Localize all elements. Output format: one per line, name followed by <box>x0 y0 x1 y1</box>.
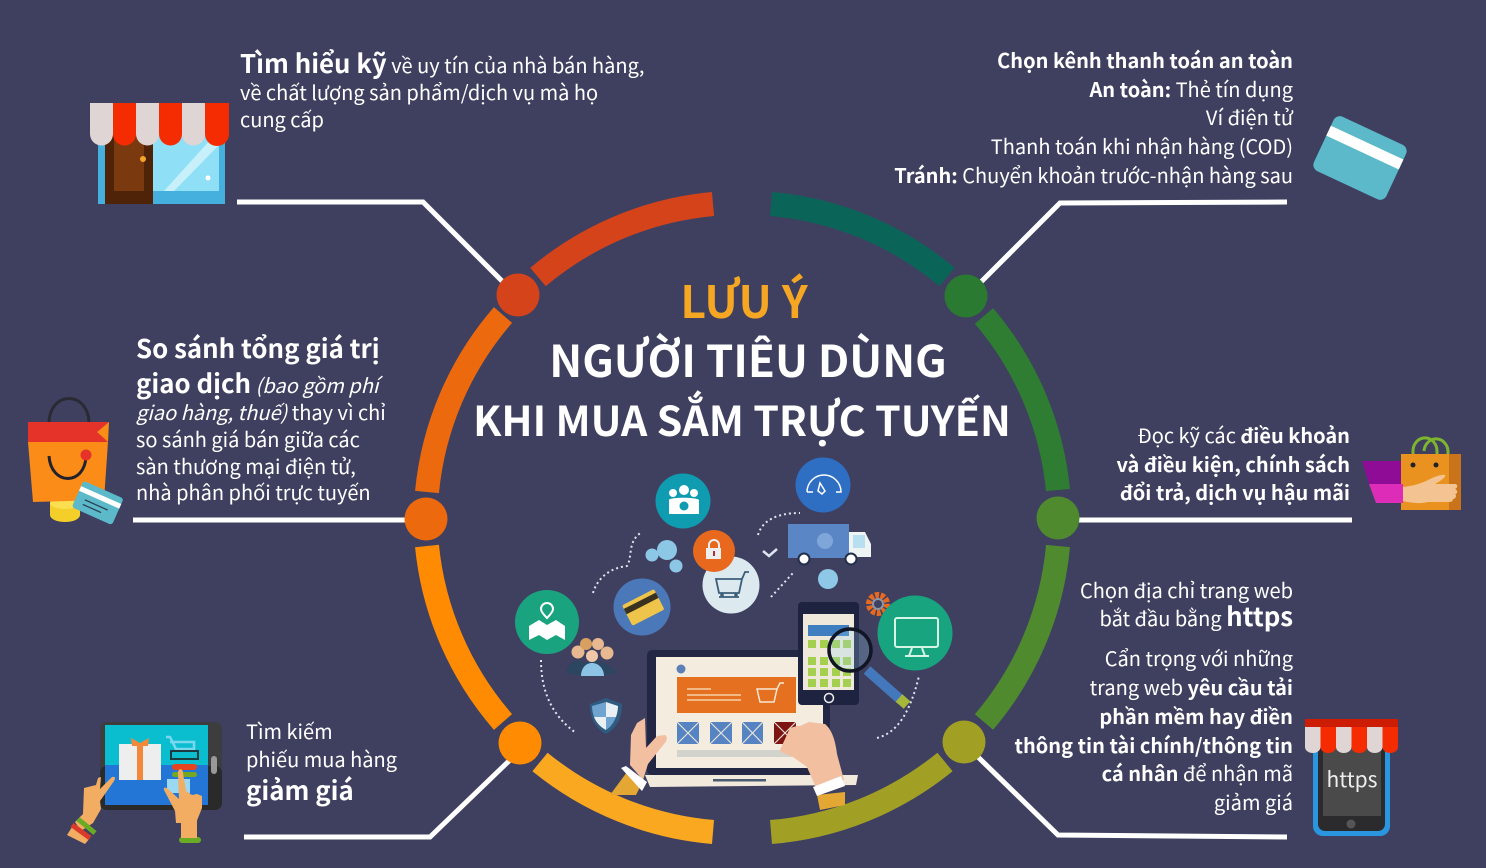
text: safe payment: Ví điện tử <box>1206 102 1294 131</box>
title: NGƯỜI TIÊU DÙNG <box>549 326 947 390</box>
text: read terms: đổi trả, dịch vụ hậu mãi <box>1120 477 1350 506</box>
icon: shield <box>590 698 622 734</box>
text: safe payment <box>894 45 1294 189</box>
text: safe payment: Chọn kênh thanh toán an toàn <box>997 45 1293 74</box>
icon: map <box>515 590 579 654</box>
text: read terms <box>1116 420 1350 506</box>
text: compare total value: nhà phân phối trực tuyến <box>136 477 371 506</box>
icon: tablet with gift and hands <box>67 722 222 844</box>
icon: truck <box>788 524 871 564</box>
text: compare total value: giao hàng, thuế) thay vì chỉ <box>136 397 386 426</box>
text: compare total value <box>136 329 386 506</box>
text: https and caution: giảm giá <box>1214 787 1293 816</box>
text: research the seller: cung cấp <box>240 104 324 133</box>
text: research the seller: Tìm hiểu kỹ về uy tín của nhà bán hàng, <box>240 44 644 81</box>
magnifier <box>829 629 907 705</box>
text: safe payment: Thanh toán khi nhận hàng (COD) <box>991 131 1293 160</box>
text: discount vouchers: Tìm kiếm <box>246 716 333 745</box>
text: discount vouchers <box>246 716 397 808</box>
text: compare total value: so sánh giá bán giữa các <box>136 424 360 453</box>
icon: orange gear <box>869 595 887 613</box>
text: discount vouchers: giảm giá <box>246 771 354 808</box>
icon: team <box>656 474 710 528</box>
ring of coloured arcs <box>427 204 1058 832</box>
text: https and caution: thông tin tài chính/thông tin <box>1015 730 1293 759</box>
text: https and caution: Cẩn trọng với những <box>1105 643 1293 672</box>
text: compare total value: sàn thương mại điện tử, <box>136 451 356 480</box>
left hand <box>610 718 667 795</box>
text: https and caution: cá nhân để nhận mã <box>1102 758 1293 787</box>
icon: monitor <box>878 596 952 670</box>
icon: storefront <box>90 103 229 204</box>
text: safe payment: Tránh: Chuyển khoản trước-nhận hàng sau <box>894 160 1293 189</box>
right hand <box>780 722 845 810</box>
text: https and caution: Chọn địa chỉ trang web <box>1080 575 1293 604</box>
text: safe payment: An toàn: Thẻ tín dụng <box>1088 74 1293 103</box>
title <box>473 266 1011 448</box>
icon: bank card <box>614 578 670 636</box>
text: compare total value: So sánh tổng giá trị <box>136 329 380 366</box>
text: read terms: và điều kiện, chính sách <box>1116 449 1350 478</box>
text: research the seller: về chất lượng sản phẩm/dịch vụ mà họ <box>240 77 598 106</box>
icon: https phone store <box>1305 719 1398 836</box>
text: https and caution <box>1015 575 1293 816</box>
text: https and caution: phần mềm hay điền <box>1099 701 1293 730</box>
title: LƯU Ý <box>680 266 809 331</box>
phone <box>798 602 859 705</box>
dotted connectors <box>541 513 919 738</box>
text: compare total value: giao dịch (bao gồm phí <box>136 364 384 401</box>
icon: gears <box>646 540 682 572</box>
icon: lock <box>693 530 735 572</box>
icon: clock <box>818 569 838 589</box>
text: https and caution: trang web yêu cầu tải <box>1090 672 1293 701</box>
ring nodes <box>404 274 1080 764</box>
icon: shopping bag with coins and card <box>28 398 124 525</box>
title: KHI MUA SẮM TRỰC TUYẾN <box>473 388 1011 448</box>
icon: cart <box>702 556 760 614</box>
icon: check mark <box>763 549 777 556</box>
text: discount vouchers: phiếu mua hàng <box>246 744 397 773</box>
icon: https phone store: https <box>1327 764 1378 794</box>
laptop <box>645 650 858 787</box>
icon: bag in hand <box>1362 438 1461 510</box>
icon: gauge <box>796 458 850 512</box>
central illustration <box>515 458 952 810</box>
text: research the seller <box>240 44 644 133</box>
leader lines <box>133 202 1352 837</box>
text: read terms: Đọc kỹ các điều khoản <box>1137 420 1350 449</box>
icon: credit card <box>1311 114 1409 202</box>
icon: people <box>566 638 617 676</box>
text: https and caution: bắt đầu bằng https <box>1100 597 1293 634</box>
